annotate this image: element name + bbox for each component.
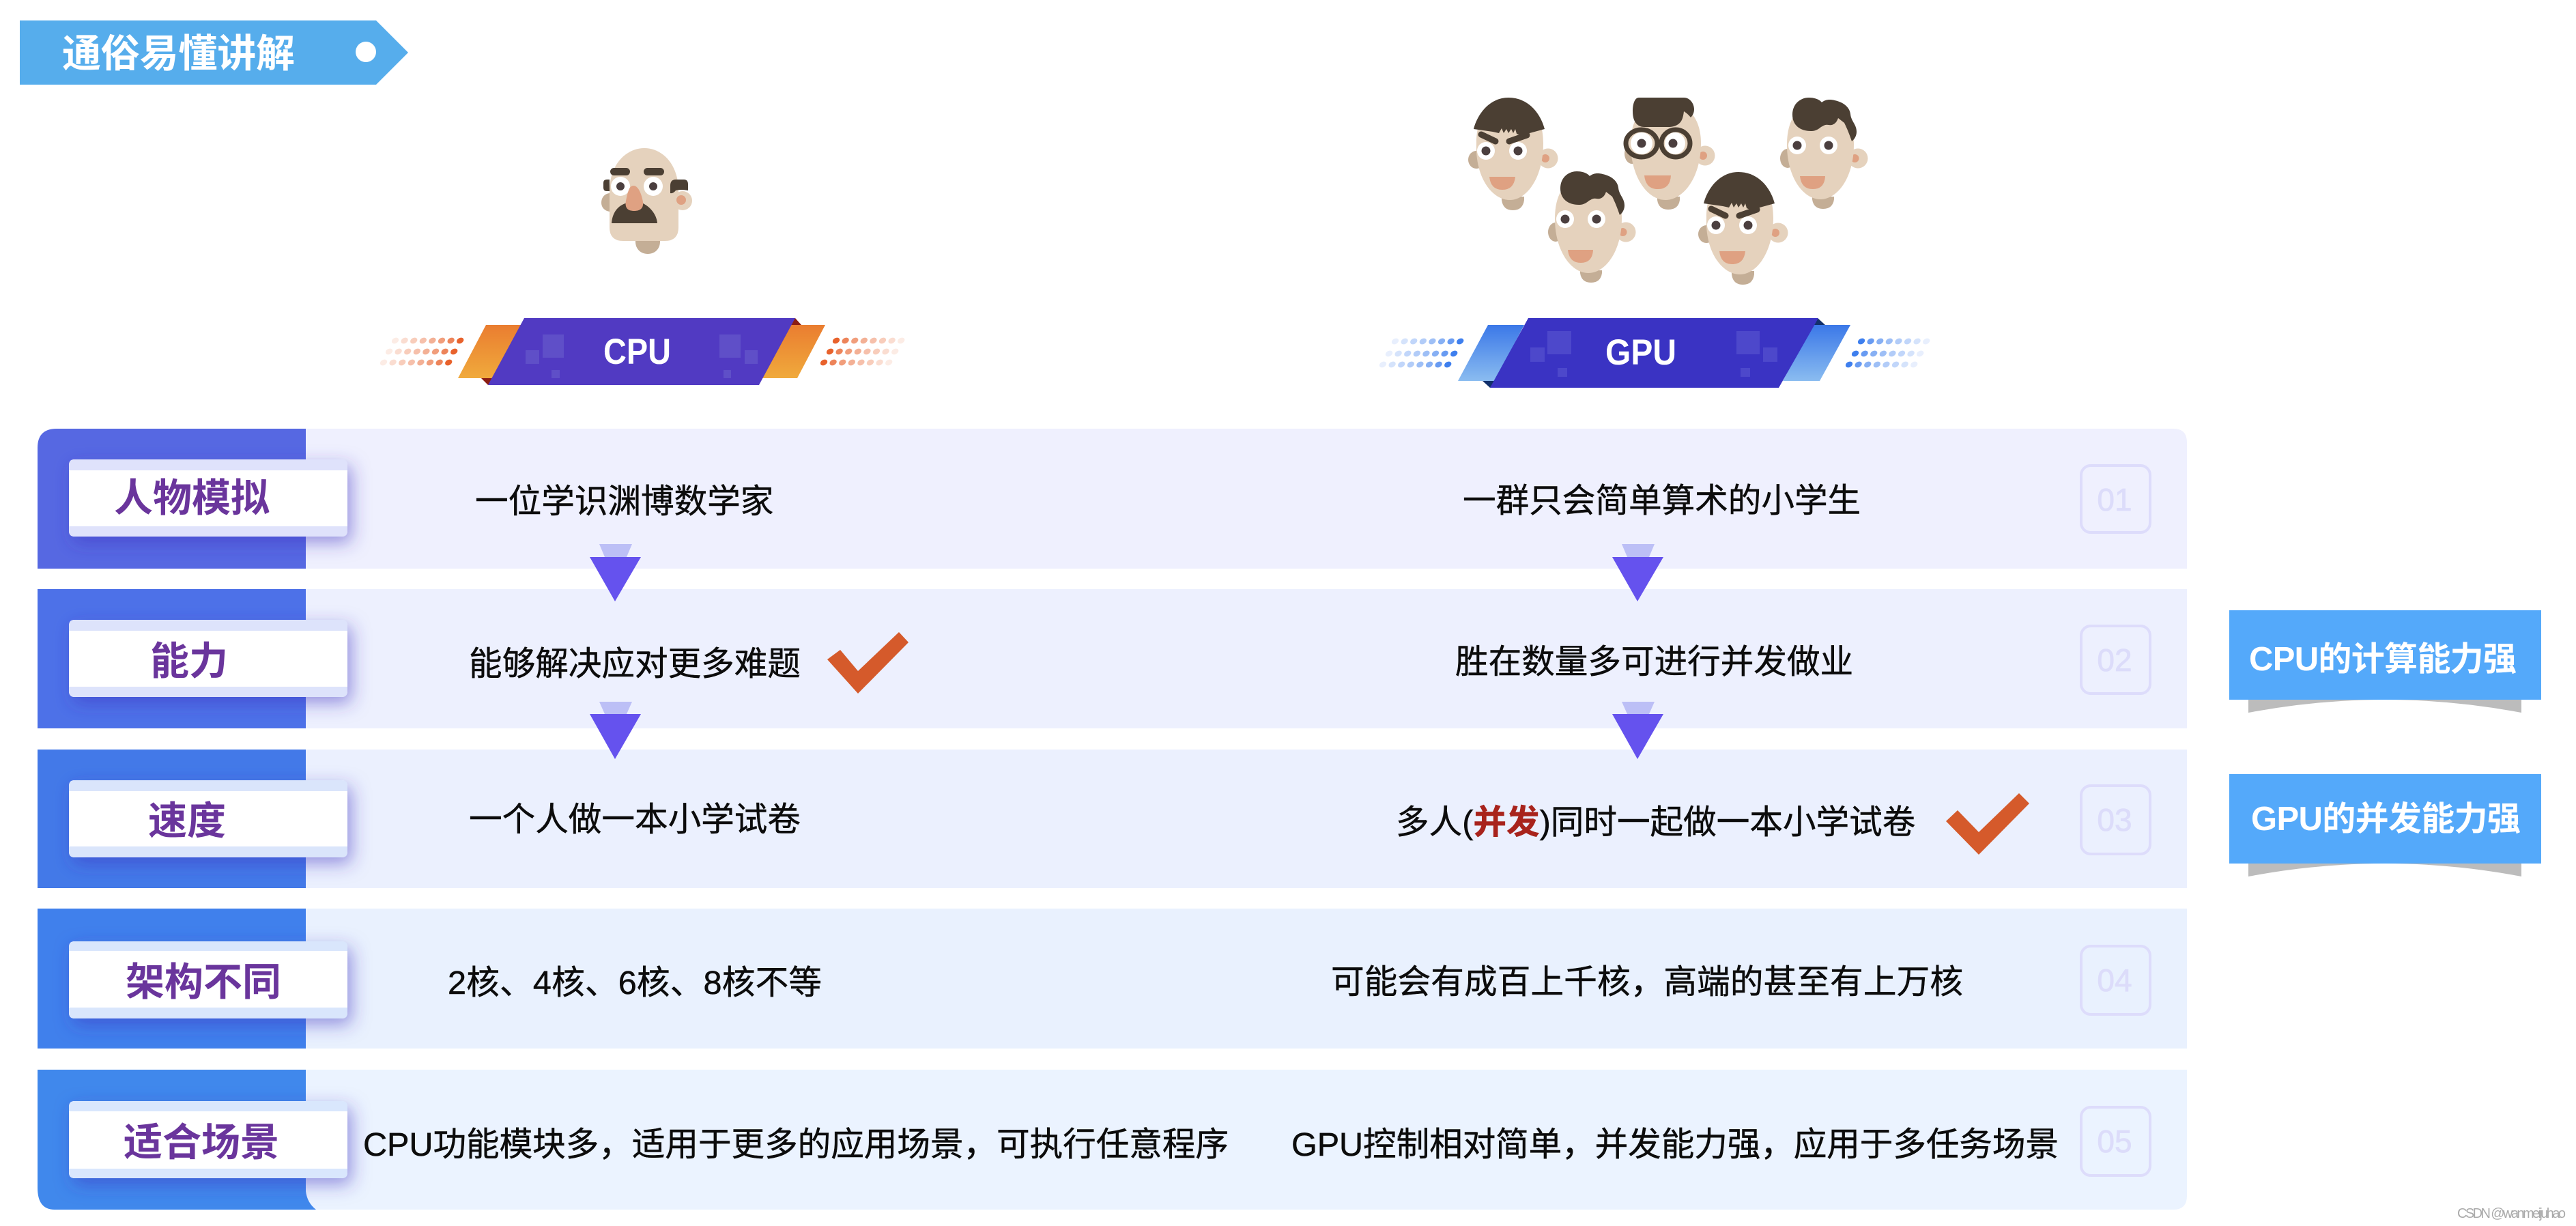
number 04: 04 <box>2097 963 2132 998</box>
label card 能力 <box>69 620 347 697</box>
label card 能力: 能力 <box>150 640 228 683</box>
watermark: CSDN @wanmeijuhao <box>2457 1206 2566 1221</box>
row 5: 适合场景 <box>38 1070 2187 1210</box>
label card 适合场景: 适合场景 <box>124 1121 279 1165</box>
icon: five GPU student heads <box>1468 98 1867 285</box>
number 03: 03 <box>2097 802 2132 838</box>
label card 速度: 速度 <box>148 799 226 843</box>
label card 架构不同 <box>69 941 347 1018</box>
arrow: CPU row 1 to 2 <box>590 544 641 601</box>
row 2: 能力 <box>38 589 2187 728</box>
check mark GPU <box>1946 793 2029 855</box>
GPU text: 胜在数量多可进行并发做业 <box>1455 644 1853 681</box>
arrow: GPU row 2 to 3 <box>1612 702 1663 759</box>
CPU banner <box>379 318 906 385</box>
label card 适合场景 <box>69 1101 347 1178</box>
CPU text: 2核、4核、6核、8核不等 <box>448 965 822 1001</box>
arrow: CPU row 2 to 3 <box>590 702 641 759</box>
number 05 <box>2081 1107 2150 1175</box>
callout: GPU的并发能力强 <box>2229 774 2541 876</box>
label card 架构不同: 架构不同 <box>126 960 281 1004</box>
number 02: 02 <box>2097 642 2132 678</box>
number 05: 05 <box>2097 1124 2132 1159</box>
label card 人物模拟 <box>69 459 347 537</box>
arrow: GPU row 1 to 2 <box>1612 544 1663 601</box>
number 02 <box>2081 626 2150 694</box>
GPU text: GPU控制相对简单，并发能力强，应用于多任务场景 <box>1291 1117 2059 1165</box>
row 1: 人物模拟 <box>38 429 2187 569</box>
label card 人物模拟: 人物模拟 <box>114 476 270 520</box>
callout: GPU的并发能力强: GPU的并发能力强 <box>2251 801 2521 838</box>
callout: CPU的计算能力强: CPU的计算能力强 <box>2249 641 2517 678</box>
GPU text: 一群只会简单算术的小学生 <box>1463 483 1861 519</box>
CPU text: 能够解决应对更多难题 <box>469 646 801 683</box>
CPU text: CPU功能模块多，适用于更多的应用场景，可执行任意程序 <box>363 1117 1229 1165</box>
GPU text with red highlight: 多人(并发)同时一起做一本小学试卷 <box>1396 804 1915 841</box>
CPU banner: CPU <box>603 332 671 372</box>
CPU text: 一位学识渊博数学家 <box>475 483 773 520</box>
icon: student with glasses <box>1625 98 1715 210</box>
header tag: 通俗易懂讲解: 通俗易懂讲解 <box>62 32 295 76</box>
icon: CPU mathematician head <box>601 148 692 254</box>
GPU banner <box>1378 318 1931 388</box>
number 03 <box>2081 786 2150 854</box>
CPU text: 一个人做一本小学试卷 <box>469 801 801 838</box>
label card 速度 <box>69 780 347 857</box>
row 3: 速度 <box>38 750 2187 888</box>
check mark CPU <box>827 632 908 694</box>
GPU banner: GPU <box>1605 332 1676 373</box>
number 01 <box>2081 466 2150 532</box>
number 04 <box>2081 946 2150 1014</box>
number 01: 01 <box>2097 482 2132 517</box>
callout: CPU的计算能力强 <box>2229 610 2541 713</box>
row 4: 架构不同 <box>38 909 2187 1049</box>
GPU text: 可能会有成百上千核，高端的甚至有上万核 <box>1331 955 1963 1003</box>
header tag: 通俗易懂讲解 <box>20 20 408 85</box>
